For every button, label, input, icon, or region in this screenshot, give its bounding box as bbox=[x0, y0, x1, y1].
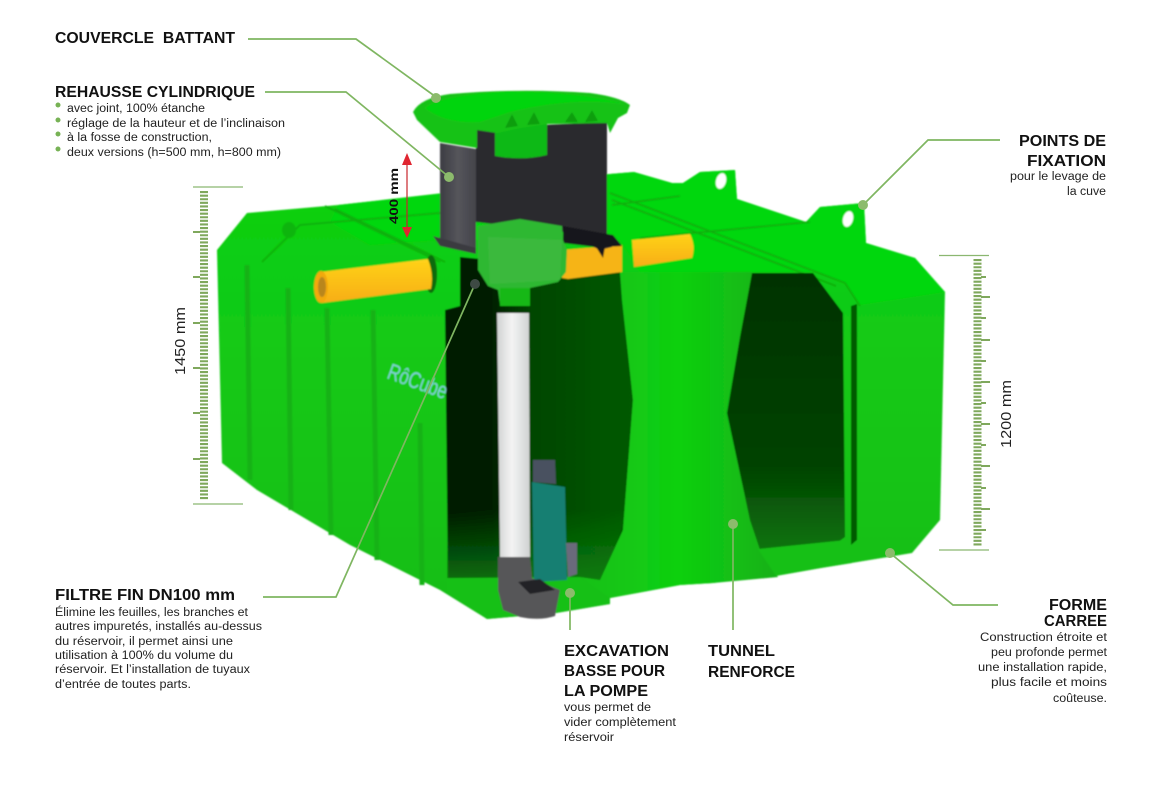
callout: filtre fin DN100: du réservoir, il permet ainsi une bbox=[55, 636, 233, 648]
left side ribs bbox=[247, 265, 422, 585]
lower interior glow bbox=[447, 510, 626, 582]
callout: rehausse cylindrique: REHAUSSE CYLINDRIQUE bbox=[55, 84, 255, 101]
callout: excavation basse pour la pompe: EXCAVATION bbox=[564, 643, 669, 660]
top face ribs bbox=[262, 193, 860, 306]
callout: tunnel renforce: TUNNEL bbox=[708, 643, 775, 660]
feature list bbox=[56, 102, 285, 159]
callout: tunnel renforce bbox=[708, 519, 795, 681]
callout: forme carree: coûteuse. bbox=[1053, 693, 1107, 705]
green cap under the lid bbox=[495, 122, 547, 158]
callout: excavation basse pour la pompe: vous permet de bbox=[564, 702, 651, 714]
logo RôCube: RôCube bbox=[384, 358, 451, 404]
callout: rehausse cylindrique bbox=[55, 84, 454, 182]
callout: excavation basse pour la pompe: BASSE POUR bbox=[564, 663, 665, 680]
callout: excavation basse pour la pompe: vider complètement bbox=[564, 717, 677, 729]
inner yellow pipe bbox=[562, 245, 622, 279]
callout: forme carree bbox=[885, 548, 1108, 705]
ruler: 1200 mm: 1200 mm bbox=[999, 380, 1015, 448]
callout: excavation basse pour la pompe: LA POMPE bbox=[564, 683, 648, 700]
ruler: 1450 mm: 1450 mm bbox=[173, 307, 189, 375]
callout: excavation basse pour la pompe: réservoir bbox=[564, 732, 614, 744]
callout: filtre fin DN100: FILTRE FIN DN100 mm bbox=[55, 587, 235, 604]
feature list: à la fosse de construction, bbox=[67, 132, 212, 144]
pit floor bbox=[447, 577, 610, 619]
tunnel sill bbox=[758, 540, 852, 576]
illustration: cutaway RôCube tank bbox=[217, 91, 945, 619]
lifting eye, left side bbox=[282, 222, 296, 238]
callout: forme carree: une installation rapide, bbox=[978, 662, 1107, 674]
interior of the cut section bbox=[445, 257, 633, 582]
fine filter box bbox=[478, 219, 567, 306]
callout: points de fixation: FIXATION bbox=[1027, 153, 1106, 170]
callout: points de fixation: la cuve bbox=[1067, 186, 1106, 198]
ruler: 1200 mm bbox=[939, 256, 1015, 550]
feature list: deux versions (h=500 mm, h=800 mm) bbox=[67, 147, 281, 159]
callout: filtre fin DN100: utilisation à 100% du volume du bbox=[55, 650, 233, 662]
callout: tunnel renforce: RENFORCE bbox=[708, 664, 795, 681]
callout: forme carree: peu profonde permet bbox=[991, 647, 1108, 659]
feature list: réglage de la hauteur et de l’inclinaison bbox=[67, 118, 285, 130]
white riser pipe bbox=[497, 313, 530, 557]
callout: forme carree: plus facile et moins bbox=[991, 677, 1107, 689]
callout: excavation basse pour la pompe bbox=[564, 588, 677, 744]
feature list: avec joint, 100% étanche bbox=[67, 103, 205, 115]
callout: forme carree: FORME bbox=[1049, 597, 1107, 614]
left yellow inlet pipe bbox=[314, 255, 437, 303]
structural pillar bbox=[580, 272, 778, 598]
callout: points de fixation bbox=[858, 133, 1106, 210]
cylindrical riser bbox=[433, 122, 622, 258]
callout: couvercle battant bbox=[55, 30, 441, 103]
ruler: 1450 mm bbox=[173, 187, 243, 504]
right yellow outlet pipe bbox=[632, 234, 694, 267]
reinforced tunnel opening bbox=[727, 273, 845, 550]
callout: filtre fin DN100: Élimine les feuilles, les branches et bbox=[55, 606, 249, 619]
swinging lid bbox=[413, 91, 630, 148]
callout: couvercle battant: COUVERCLE BATTANT bbox=[55, 30, 235, 47]
submersible pump bbox=[532, 460, 577, 582]
lifting eye holes bbox=[714, 172, 855, 228]
dimension: 400 mm red arrow: 400 mm bbox=[387, 168, 401, 224]
gray pump sump bbox=[498, 557, 560, 619]
callout: filtre fin DN100 bbox=[55, 279, 480, 691]
callout: filtre fin DN100: réservoir. Et l’installation de tuyaux bbox=[55, 664, 250, 676]
tank body silhouette bbox=[217, 170, 945, 619]
dimension: 400 mm red arrow bbox=[387, 153, 412, 238]
callout: forme carree: Construction étroite et bbox=[980, 632, 1108, 644]
top face of the tank bbox=[330, 170, 945, 305]
callout: points de fixation: pour le levage de bbox=[1010, 171, 1106, 183]
callout: filtre fin DN100: d’entrée de toutes parts. bbox=[55, 679, 191, 691]
groove next to the tunnel bbox=[851, 304, 857, 545]
callout: filtre fin DN100: autres impuretés, installés au-dessus bbox=[55, 621, 262, 633]
callout: forme carree: CARREE bbox=[1044, 613, 1107, 630]
callout: points de fixation: POINTS DE bbox=[1019, 133, 1106, 150]
